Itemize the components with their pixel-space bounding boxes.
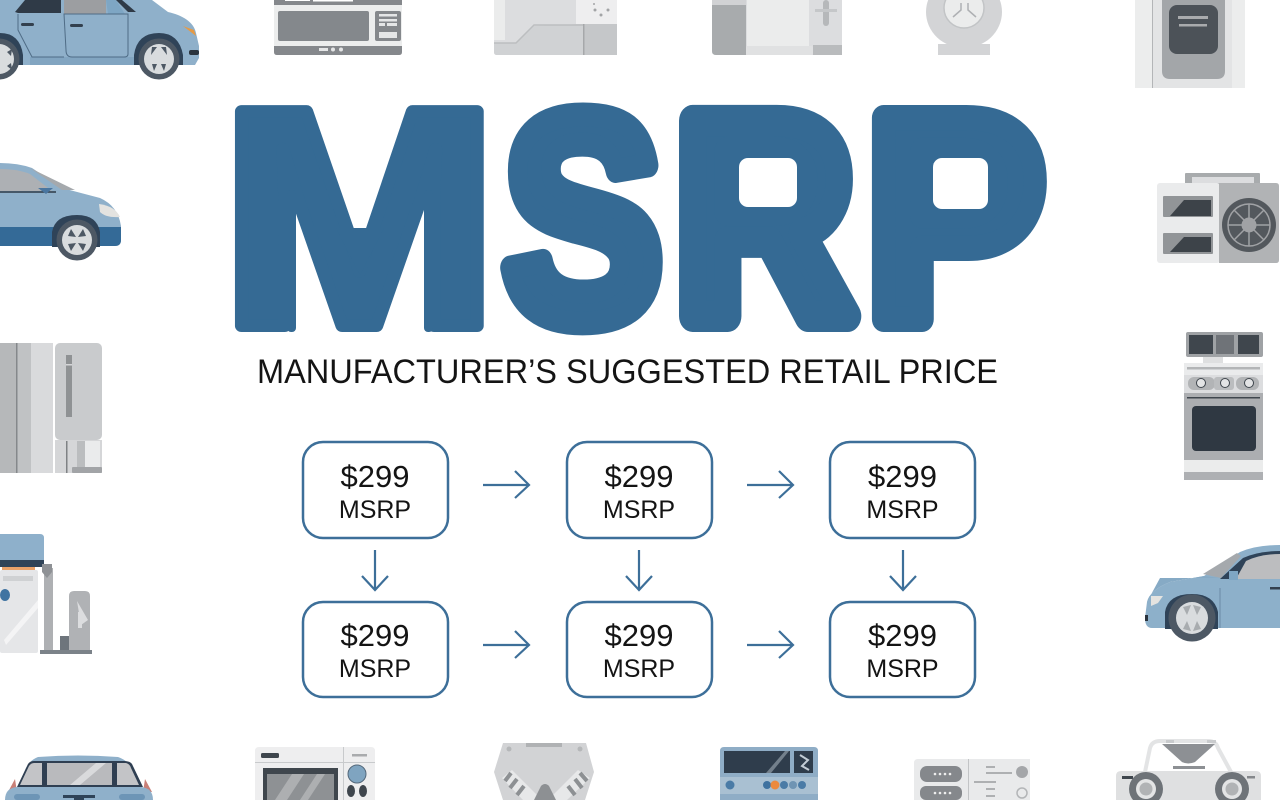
icon: blue car top left bbox=[0, 0, 199, 80]
arrow: row 2 column 1 to 2 bbox=[483, 631, 529, 658]
arrow: column 3 down bbox=[890, 550, 916, 590]
price box: row 1 column 3: MSRP bbox=[866, 496, 939, 524]
icon: microwave top bbox=[274, 0, 402, 55]
icon: blue car left bbox=[0, 163, 121, 260]
icon: appliance top bbox=[494, 0, 617, 55]
price box: row 2 column 2: $299 bbox=[605, 618, 673, 653]
arrow: row 1 column 2 to 3 bbox=[747, 471, 793, 498]
price box: row 2 column 3 bbox=[830, 602, 975, 697]
title: MSRP: S bbox=[503, 53, 662, 383]
icon: stove and oven right bbox=[1184, 332, 1263, 480]
price box: row 1 column 2: $299 bbox=[605, 459, 673, 494]
icon: blue hatchback bottom left bbox=[5, 756, 153, 800]
price box: row 2 column 3: MSRP bbox=[866, 655, 939, 683]
price box: row 1 column 1: MSRP bbox=[339, 496, 411, 524]
price box: row 2 column 1 bbox=[303, 602, 448, 697]
icon: blue car bottom right bbox=[1145, 545, 1280, 642]
price box: row 1 column 1: $299 bbox=[341, 459, 409, 494]
title: MSRP: P bbox=[866, 54, 1044, 382]
icon: toaster top bbox=[712, 0, 842, 55]
icon: round fan top bbox=[926, 0, 1002, 55]
price box: row 2 column 3: $299 bbox=[868, 618, 937, 653]
icon: blue control panel bottom bbox=[720, 747, 818, 800]
icon: refrigerator left bbox=[0, 343, 102, 473]
price box: row 1 column 3: $299 bbox=[868, 459, 937, 494]
icon: server unit bottom bbox=[914, 759, 1030, 800]
title: MSRP: R bbox=[676, 60, 853, 377]
arrow: column 2 down bbox=[626, 550, 652, 590]
icon: appliance bottom right bbox=[1116, 740, 1261, 800]
price box: row 2 column 2: MSRP bbox=[603, 655, 675, 683]
subtitle: MANUFACTURER’S SUGGESTED RETAIL PRICE bbox=[257, 353, 998, 391]
title: MSRP bbox=[219, 43, 1044, 392]
price box: row 1 column 3 bbox=[830, 442, 975, 538]
price box: row 1 column 2 bbox=[567, 442, 712, 538]
icon: air conditioner right bbox=[1157, 173, 1279, 263]
price box: row 2 column 2 bbox=[567, 602, 712, 697]
icon: microwave bottom bbox=[255, 747, 375, 800]
arrow: row 2 column 2 to 3 bbox=[747, 631, 793, 658]
icon: vent unit bottom bbox=[494, 743, 594, 800]
icon: fuel pump left bbox=[0, 534, 92, 654]
arrow: row 1 column 1 to 2 bbox=[483, 471, 529, 498]
arrow: column 1 down bbox=[362, 550, 388, 590]
title: MSRP: M bbox=[219, 43, 500, 392]
icon: appliance top right bbox=[1135, 0, 1245, 88]
price box: row 2 column 1: MSRP bbox=[339, 655, 411, 683]
price box: row 1 column 1 bbox=[303, 442, 448, 538]
price box: row 1 column 2: MSRP bbox=[603, 496, 675, 524]
price box: row 2 column 1: $299 bbox=[341, 618, 409, 653]
